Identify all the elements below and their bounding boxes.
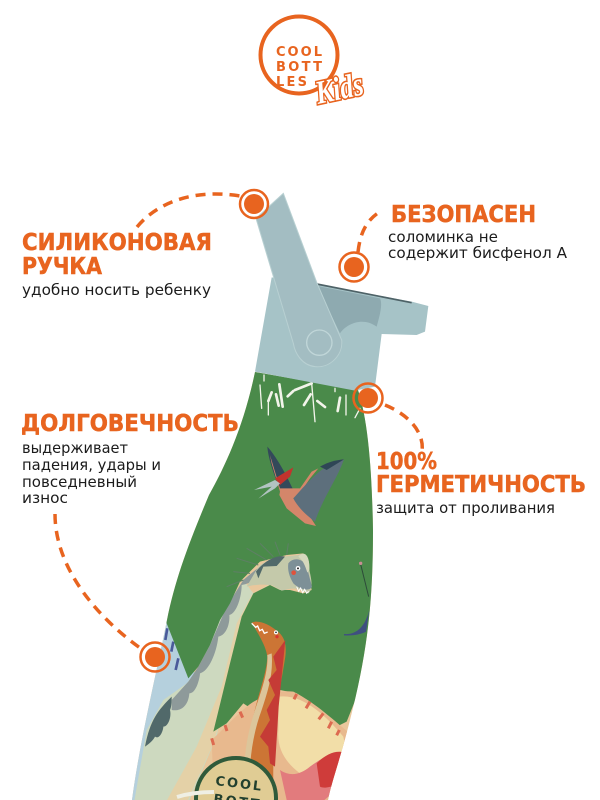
logo: Cool Bottles Kids: COOL [276, 45, 322, 60]
logo: Cool Bottles Kids: LES [276, 75, 307, 90]
callout: leakproof [354, 384, 586, 517]
callout: durability: повседневный [22, 473, 137, 491]
callout: durability [21, 411, 239, 672]
callout: durability: износ [22, 489, 68, 507]
logo: Cool Bottles Kids [260, 16, 367, 112]
callout: durability: выдерживает [22, 439, 128, 457]
callout: safe straw [340, 202, 567, 282]
logo: Cool Bottles Kids: Kids [311, 67, 367, 112]
callout: silicone handle: удобно носить ребенку [22, 281, 211, 299]
bottle cap and straw handle [255, 193, 428, 391]
callout: durability: ДОЛГОВЕЧНОСТЬ [21, 411, 239, 437]
bottle brand badge [177, 758, 276, 800]
callout: durability: падения, удары и [22, 456, 161, 474]
bottle brand badge: COOL [215, 774, 262, 795]
callout: safe straw: соломинка не [388, 228, 498, 246]
callout: silicone handle: СИЛИКОНОВАЯ [22, 230, 212, 256]
callout: silicone handle: РУЧКА [22, 254, 102, 280]
callout: safe straw: БЕЗОПАСЕН [391, 202, 536, 228]
callout: leakproof: ГЕРМЕТИЧНОСТЬ [376, 472, 586, 498]
callout: safe straw: содержит бисфенол А [388, 244, 567, 262]
callout: leakproof: 100% [376, 449, 437, 475]
callout: leakproof: защита от проливания [376, 499, 555, 517]
callout: silicone handle [22, 190, 268, 299]
bottle body with dinosaur print [132, 372, 373, 800]
logo: Cool Bottles Kids: BOTT [276, 60, 322, 75]
